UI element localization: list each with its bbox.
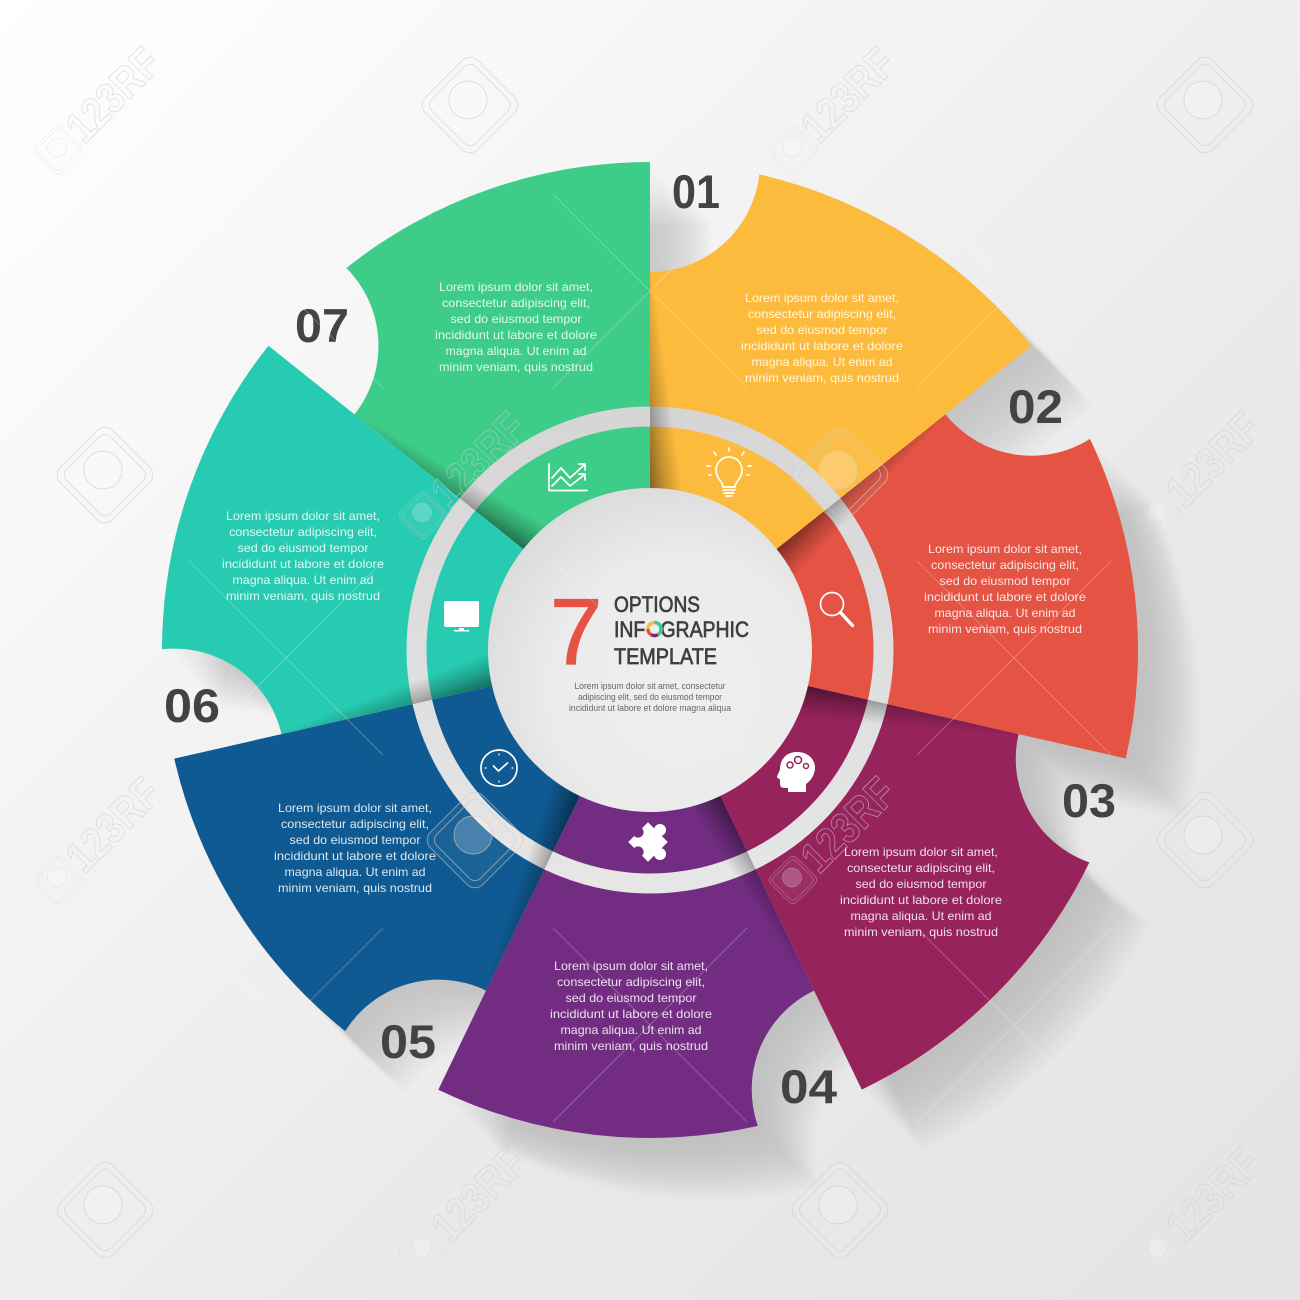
text: segment 04: consectetur adipiscing elit, xyxy=(557,975,705,989)
heading options: OPTIONS xyxy=(614,592,700,617)
text: segment 06: Lorem ipsum dolor sit amet, xyxy=(226,509,380,523)
text: segment 07 xyxy=(435,280,597,374)
icon: magnifier xyxy=(820,592,852,626)
text: segment 04: sed do eiusmod tempor xyxy=(566,991,696,1005)
text: segment 07: consectetur adipiscing elit, xyxy=(442,296,590,310)
text: segment 07: incididunt ut labore et dolore xyxy=(435,328,597,342)
text: segment 02: magna aliqua. Ut enim ad xyxy=(934,606,1076,620)
text: segment 03: sed do eiusmod tempor xyxy=(856,877,986,891)
text: segment 02: sed do eiusmod tempor xyxy=(940,574,1070,588)
segment 01 yellow xyxy=(650,174,1032,650)
heading infographic: INFOGRAPHIC xyxy=(614,617,749,642)
segment 06 teal xyxy=(101,278,650,756)
text: segment 07: Lorem ipsum dolor sit amet, xyxy=(439,280,593,294)
watermark overlay: 123RF xyxy=(792,768,905,882)
text: segment 01: minim veniam, quis nostrud xyxy=(745,371,899,385)
text: segment 05: sed do eiusmod tempor xyxy=(290,833,420,847)
centre paragraph: adipiscing elit, sed do eiusmod tempor xyxy=(578,692,722,703)
centre paragraph xyxy=(569,681,732,714)
text: segment 04: minim veniam, quis nostrud xyxy=(554,1039,708,1053)
text: segment 05: minim veniam, quis nostrud xyxy=(278,881,432,895)
text: segment 05: incididunt ut labore et dolore xyxy=(274,849,436,863)
number 03: 03 xyxy=(1062,774,1116,827)
watermark overlay: 123RF xyxy=(57,768,170,882)
watermark overlay: 123RF xyxy=(1157,1138,1270,1252)
number 02: 02 xyxy=(1008,380,1063,433)
text: segment 03: Lorem ipsum dolor sit amet, xyxy=(844,845,998,859)
watermark overlay: 123RF xyxy=(422,403,535,517)
segment 04 purple xyxy=(306,650,856,1244)
text: segment 01: sed do eiusmod tempor xyxy=(756,323,888,337)
icon: clock xyxy=(481,750,517,786)
icon: head with gears xyxy=(777,752,815,792)
donut letter O xyxy=(648,622,661,636)
text: segment 07: magna aliqua. Ut enim ad xyxy=(446,344,586,358)
centre paragraph: Lorem ipsum dolor sit amet, consectetur xyxy=(574,681,726,692)
heading template: TEMPLATE xyxy=(614,644,717,669)
centre paragraph: incididunt ut labore et dolore magna aliqua xyxy=(569,703,732,714)
text: segment 07: sed do eiusmod tempor xyxy=(450,312,582,326)
number 07: 07 xyxy=(295,299,349,352)
text: segment 05: consectetur adipiscing elit, xyxy=(281,817,429,831)
number 05: 05 xyxy=(380,1015,436,1068)
number 01: 01 xyxy=(672,165,720,218)
text: segment 05: Lorem ipsum dolor sit amet, xyxy=(278,801,432,815)
centre disc xyxy=(488,488,812,812)
text: segment 06 xyxy=(222,509,384,603)
text: segment 07: minim veniam, quis nostrud xyxy=(439,360,593,374)
text: segment 06: incididunt ut labore et dolore xyxy=(222,557,384,571)
number 06: 06 xyxy=(164,679,220,732)
watermark overlay: 123RF xyxy=(57,38,170,152)
centre title block xyxy=(550,579,749,714)
watermark overlay: 123RF xyxy=(1157,403,1270,517)
text: segment 05 xyxy=(274,801,436,895)
icon: monitor xyxy=(444,601,479,632)
fold shadows between segments xyxy=(274,272,1019,1005)
text: segment 01: incididunt ut labore et dolore xyxy=(741,339,903,353)
text: segment 02: consectetur adipiscing elit, xyxy=(931,558,1079,572)
number 04: 04 xyxy=(780,1060,837,1113)
text: segment 01: consectetur adipiscing elit, xyxy=(748,307,896,321)
text: segment 02: incididunt ut labore et dolore xyxy=(924,590,1086,604)
watermark overlay: 123RF xyxy=(422,1138,535,1252)
icon: light bulb xyxy=(707,448,751,496)
text: segment 02 xyxy=(924,542,1086,636)
text: segment 02: Lorem ipsum dolor sit amet, xyxy=(928,542,1082,556)
segment 07 green xyxy=(278,55,888,650)
text: segment 04: Lorem ipsum dolor sit amet, xyxy=(554,959,708,973)
segment 05 blue xyxy=(100,484,650,1079)
text: segment 04 xyxy=(550,959,712,1053)
text: segment 05: magna aliqua. Ut enim ad xyxy=(284,865,426,879)
text: segment 06: consectetur adipiscing elit, xyxy=(229,525,377,539)
segment 03 maroon xyxy=(565,650,1114,1128)
text: segment 03: minim veniam, quis nostrud xyxy=(844,925,998,939)
text: segment 01: magna aliqua. Ut enim ad xyxy=(752,355,892,369)
text: segment 04: magna aliqua. Ut enim ad xyxy=(560,1023,702,1037)
text: segment 02: minim veniam, quis nostrud xyxy=(928,622,1082,636)
icon: puzzle piece xyxy=(620,812,681,872)
text: segment 06: magna aliqua. Ut enim ad xyxy=(232,573,374,587)
big number 7: 7 xyxy=(550,579,602,684)
grey ring xyxy=(416,416,884,884)
text: segment 03: consectetur adipiscing elit, xyxy=(847,861,995,875)
text: segment 03: magna aliqua. Ut enim ad xyxy=(850,909,992,923)
text: segment 01 xyxy=(741,291,903,385)
text: segment 03: incididunt ut labore et dolore xyxy=(840,893,1002,907)
watermark overlay: 123RF xyxy=(792,38,905,152)
text: segment 01: Lorem ipsum dolor sit amet, xyxy=(745,291,899,305)
text: segment 06: sed do eiusmod tempor xyxy=(238,541,368,555)
text: segment 06: minim veniam, quis nostrud xyxy=(226,589,380,603)
text: segment 03 xyxy=(840,845,1002,939)
icon: chart xyxy=(549,464,587,490)
text: segment 04: incididunt ut labore et dolore xyxy=(550,1007,712,1021)
segment 02 red xyxy=(650,353,1260,948)
